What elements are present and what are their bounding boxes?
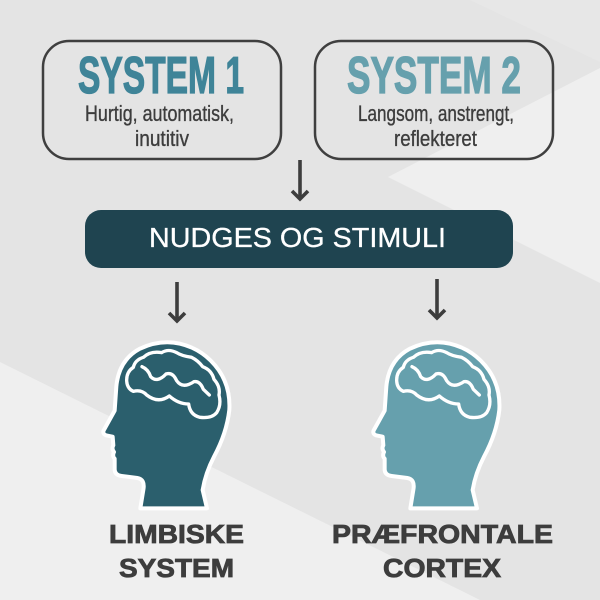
arrow: systems to nudges — [292, 160, 308, 199]
label: limbiske system — [109, 519, 244, 583]
icon: head with brain, prefrontal cortex — [373, 342, 499, 508]
arrow: nudges to limbic system — [169, 282, 185, 321]
icon: head with brain, limbic system — [103, 342, 229, 508]
heading: system 1: SYSTEM 1 — [78, 47, 244, 105]
panel: system 1 — [43, 41, 281, 159]
heading: system 2: SYSTEM 2 — [347, 47, 521, 105]
label: praefrontale cortex: CORTEX — [383, 553, 502, 583]
text: system 1 description: inutitiv — [135, 126, 189, 151]
banner: nudges og stimuli — [85, 210, 513, 268]
label: limbiske system: SYSTEM — [119, 553, 234, 583]
label: limbiske system: LIMBISKE — [109, 519, 244, 549]
label: praefrontale cortex: PRÆFRONTALE — [332, 519, 553, 549]
text: system 2 description: Langsom, anstrengt, — [358, 101, 514, 126]
panel: system 2 — [315, 41, 553, 159]
arrow: nudges to prefrontal cortex — [429, 279, 445, 318]
text: system 1 description — [85, 101, 234, 151]
banner: nudges og stimuli: NUDGES OG STIMULI — [149, 222, 446, 253]
text: system 2 description — [358, 101, 514, 151]
label: praefrontale cortex — [332, 519, 553, 583]
text: system 1 description: Hurtig, automatisk, — [85, 101, 234, 126]
text: system 2 description: reflekteret — [394, 126, 477, 151]
